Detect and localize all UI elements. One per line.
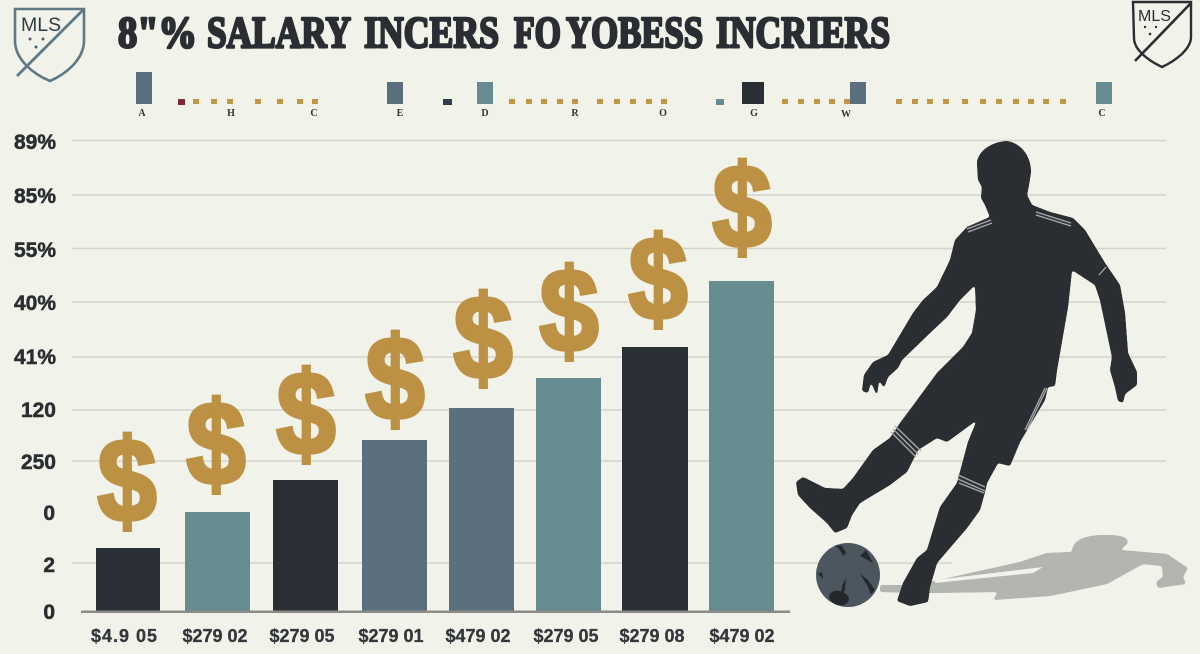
title (118, 8, 890, 57)
legend strip: O (659, 108, 667, 119)
dollar signs: $ (453, 271, 513, 403)
y-axis labels: 41% (14, 346, 56, 369)
x-axis labels (91, 626, 775, 646)
x-axis labels: $279 05 (533, 626, 599, 646)
logo: MLS shield right: MLS (1138, 8, 1171, 25)
y-axis labels: 89% (14, 131, 56, 154)
y-axis labels: 2 (43, 554, 55, 577)
y-axis labels (14, 131, 56, 624)
legend strip: H (227, 108, 235, 119)
x-axis labels: $4.9 05 (91, 626, 157, 646)
y-axis labels: 40% (14, 292, 56, 315)
bar chart (81, 281, 790, 613)
dollar signs (97, 140, 772, 546)
logo: MLS shield right (1133, 2, 1191, 67)
dollar signs: $ (539, 244, 599, 376)
x-axis labels: $279 01 (358, 626, 424, 646)
player silhouette (796, 141, 1137, 606)
logo: MLS shield left: MLS (21, 14, 61, 36)
legend strip: D (481, 108, 489, 119)
x-axis labels: $279 05 (269, 626, 335, 646)
x-axis labels: $479 02 (709, 626, 775, 646)
y-axis labels: 120 (21, 399, 56, 422)
dollar signs: $ (712, 140, 772, 272)
y-axis labels: 0 (43, 502, 55, 525)
logo: MLS shield left (15, 9, 84, 81)
dollar signs: $ (276, 347, 336, 479)
dollar signs: $ (97, 414, 157, 546)
x-axis labels: $279 08 (619, 626, 685, 646)
y-axis labels: 55% (14, 239, 56, 262)
legend strip: G (750, 108, 758, 119)
y-axis labels: 0 (43, 601, 55, 624)
legend strip: R (571, 108, 579, 119)
title: SALARY (207, 8, 351, 57)
legend strip: W (841, 109, 851, 120)
dollar signs: $ (365, 312, 425, 444)
y-axis labels: 85% (14, 185, 56, 208)
title: INCRIERS (716, 8, 890, 57)
title: INCERS (364, 8, 499, 57)
legend strip: C (1098, 108, 1106, 119)
title: 8"% (118, 8, 197, 57)
soccer ball (816, 543, 880, 607)
legend strip (136, 72, 1112, 120)
title: FO (514, 8, 561, 57)
title: YOBESS (566, 8, 703, 57)
y-axis labels: 250 (21, 451, 56, 474)
dollar signs: $ (628, 212, 688, 344)
legend strip: E (397, 108, 404, 119)
x-axis labels: $479 02 (445, 626, 511, 646)
dollar signs: $ (186, 377, 246, 509)
legend strip: C (310, 108, 318, 119)
player shadow (880, 535, 1188, 600)
x-axis labels: $279 02 (182, 626, 248, 646)
legend strip: A (138, 108, 146, 119)
